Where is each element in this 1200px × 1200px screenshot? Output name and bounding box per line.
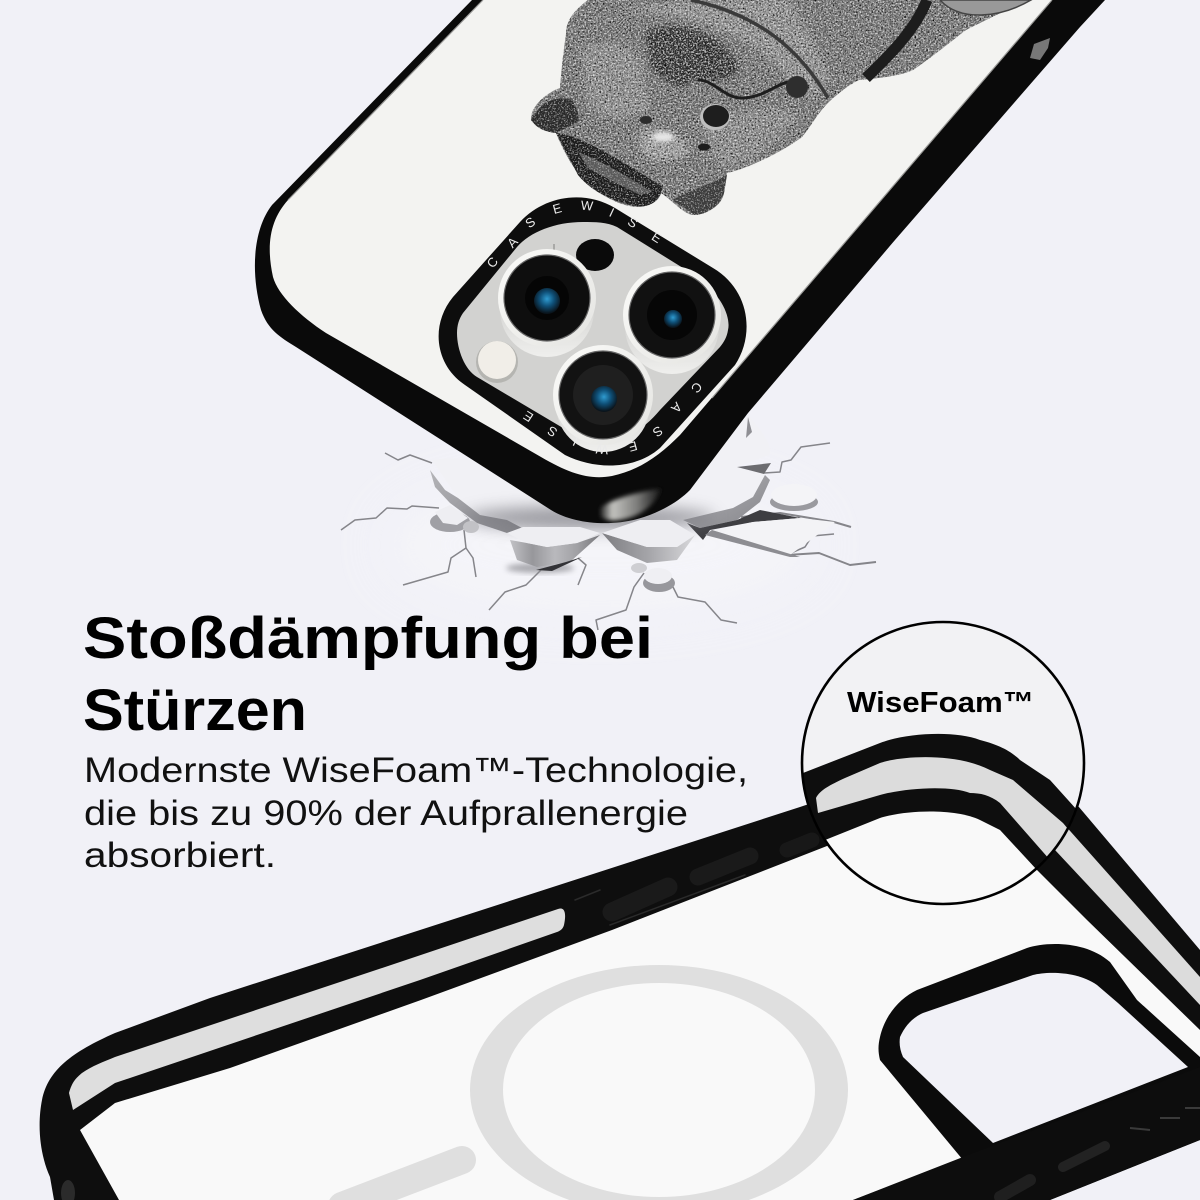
edge highlight bbox=[288, 0, 1052, 398]
brand text on ring: E bbox=[520, 408, 536, 425]
body text: Modernste WiseFoam™-Technologie, bbox=[84, 751, 748, 790]
back panel bbox=[270, 0, 1052, 477]
brand text on ring: C bbox=[688, 379, 705, 396]
camera cutout bbox=[878, 944, 1200, 1160]
WiseFoam magnifier callout bbox=[800, 620, 1086, 906]
brand text on ring: A bbox=[504, 234, 521, 251]
brand text on ring: S bbox=[522, 214, 538, 231]
top phone case bbox=[255, 0, 1105, 523]
fur details bbox=[640, 0, 1031, 150]
brand text on ring: W bbox=[595, 441, 609, 458]
lidar sensor bbox=[576, 239, 614, 271]
clear back panel bbox=[80, 815, 1200, 1200]
lens: top left bbox=[498, 249, 596, 357]
right broken plate bbox=[640, 415, 800, 540]
foam strip left bbox=[69, 908, 565, 1110]
left broken plate bbox=[430, 458, 640, 533]
brand text on ring: C bbox=[484, 254, 501, 271]
dark fur parts bbox=[531, 98, 727, 215]
flash bbox=[476, 341, 518, 383]
brand text on ring: S bbox=[544, 423, 560, 440]
heading: Stürzen bbox=[83, 678, 307, 743]
body text bbox=[84, 751, 748, 875]
heading bbox=[83, 606, 653, 743]
lens outline bbox=[802, 622, 1084, 904]
fur body bbox=[531, 0, 1031, 215]
body text: die bis zu 90% der Aufprallenergie bbox=[84, 794, 688, 833]
phone contact shadow bbox=[465, 506, 715, 530]
crack lines bbox=[341, 443, 876, 630]
illustration: upside-down animal bbox=[531, 0, 1031, 215]
brand text on ring: E bbox=[626, 438, 639, 455]
side button glint bbox=[1030, 38, 1050, 60]
bottom phone case inside view bbox=[40, 804, 1200, 1200]
magnetic alignment pill bbox=[342, 1160, 462, 1200]
foam strip right bbox=[1055, 830, 1200, 1005]
rock chunk left bbox=[506, 527, 600, 573]
heading: Stoßdämpfung bei bbox=[83, 606, 653, 671]
cracked ground impact bbox=[341, 415, 876, 630]
case frame bbox=[40, 804, 1200, 1200]
brand text on ring: W bbox=[580, 197, 594, 214]
brand text on ring: I bbox=[570, 434, 580, 449]
camera module bbox=[439, 197, 747, 465]
lens background bbox=[801, 621, 1085, 905]
rock chunk right bbox=[602, 520, 695, 563]
camera bumper ring bbox=[439, 197, 747, 465]
brand text on ring: A bbox=[668, 399, 685, 416]
magnified corner bbox=[804, 734, 1076, 868]
small debris bbox=[430, 484, 818, 592]
microphone bbox=[553, 244, 555, 256]
brand text on ring bbox=[484, 197, 705, 458]
lens: right bbox=[623, 266, 721, 374]
lens: bottom bbox=[553, 345, 653, 452]
body text: absorbiert. bbox=[84, 836, 276, 875]
lower right plate bbox=[705, 518, 835, 557]
bumper highlight bbox=[600, 488, 662, 520]
magnetic ring bbox=[470, 965, 848, 1200]
brand text on ring: S bbox=[650, 423, 666, 440]
brand text on ring: E bbox=[551, 200, 564, 217]
brand text on ring: S bbox=[625, 214, 641, 231]
side buttons bbox=[575, 840, 812, 925]
lens label: WiseFoam™ bbox=[847, 687, 1034, 719]
camera plate bbox=[457, 222, 729, 437]
port slots bbox=[61, 1108, 1200, 1200]
bottom edge bar bbox=[853, 1140, 1200, 1200]
brand text on ring: E bbox=[649, 229, 665, 246]
brand text on ring: I bbox=[607, 205, 617, 220]
case black bumper bbox=[255, 0, 1105, 523]
